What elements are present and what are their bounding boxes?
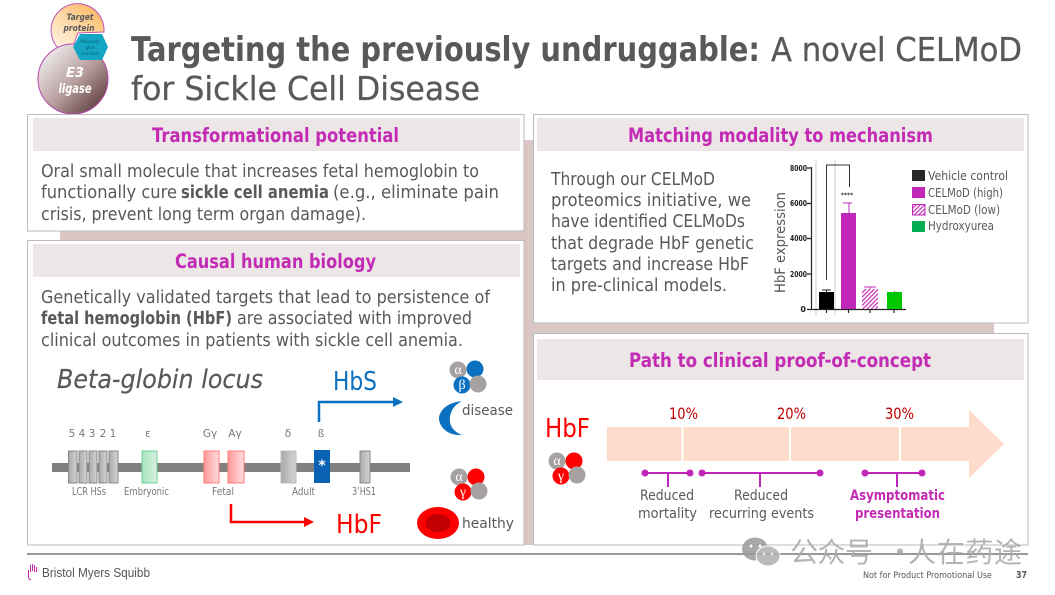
outcome: reduced mortality <box>638 470 697 522</box>
icon: healthy red cell <box>417 507 459 539</box>
chart legend <box>912 168 1008 233</box>
outcome: reduced recurring events <box>698 470 824 522</box>
bar chart: HbF expression: HbF expression <box>773 192 789 293</box>
label: HbF: HbF <box>336 510 382 540</box>
panel: transformational potential <box>28 114 524 231</box>
icon: sickle hemoglobin <box>450 360 486 394</box>
outcome: reduced mortality: mortality <box>638 506 697 522</box>
watermark: 人在药途 <box>908 531 1022 571</box>
footer note: Not for Product Promotional Use <box>863 571 992 581</box>
icon: molecular glue logo <box>38 4 108 114</box>
page number: 37 <box>1016 570 1027 581</box>
bar chart: HbF expression: **** <box>841 192 854 199</box>
gene locus diagram: 3 <box>89 428 95 440</box>
icon: sickle hemoglobin: β <box>458 378 466 393</box>
gene locus diagram: Aγ <box>228 428 242 440</box>
icon: fetal hemoglobin: γ <box>557 469 564 484</box>
panel: transformational potential: Oral small molecule that increases fetal hemoglobin to <box>41 162 479 182</box>
icon: sickle cell <box>439 401 462 435</box>
icon: fetal hemoglobin: γ <box>459 485 466 500</box>
footer rule <box>27 553 1028 555</box>
arrow: HbF level scale: 10% <box>669 404 698 423</box>
arrow: HbF level scale: 30% <box>885 404 914 423</box>
arrow: HbF level scale <box>607 404 1004 478</box>
bar chart: HbF expression: 2000 <box>790 270 807 279</box>
gene locus diagram: * <box>318 458 326 474</box>
watermark <box>742 531 1022 571</box>
bar chart: HbF expression: 4000 <box>790 234 807 243</box>
panel: transformational potential: functionally cure <box>41 183 177 203</box>
panel: matching modality to mechanism: Matching modality to mechanism <box>628 124 933 147</box>
panel: causal human biology: are associated with improved <box>237 309 472 329</box>
label: disease: disease <box>462 403 513 419</box>
title: for Sickle Cell Disease <box>131 69 480 108</box>
outcome: reduced recurring events: Reduced <box>734 488 788 504</box>
panel: path to clinical proof-of-concept <box>534 334 1028 545</box>
gene locus diagram: Embryonic <box>124 486 169 498</box>
panel: transformational potential: Transformational potential <box>152 124 399 147</box>
gene locus diagram: 3’HS1 <box>352 486 376 498</box>
bar chart: HbF expression <box>773 160 906 315</box>
icon: sickle hemoglobin: α <box>454 363 462 378</box>
outcome: reduced recurring events: recurring events <box>709 506 814 522</box>
panel: causal human biology: fetal hemoglobin (HbF) <box>41 309 232 329</box>
panel: matching modality to mechanism <box>534 114 1028 323</box>
title: A novel CELMoD <box>771 30 1022 69</box>
bar chart: HbF expression: 6000 <box>790 199 807 208</box>
arrow: HbF level scale: 20% <box>777 404 806 423</box>
bar chart: HbF expression: 0 <box>800 305 806 314</box>
label: HbF: HbF <box>545 414 590 444</box>
panel: causal human biology: clinical outcomes in patients with sickle cell anemia. <box>41 331 463 351</box>
panel: matching modality to mechanism: in pre-clinical models. <box>551 276 727 296</box>
panel: matching modality to mechanism: proteomics initiative, we <box>551 191 751 211</box>
connector band behind panels <box>60 140 994 545</box>
title <box>131 30 1022 108</box>
icon: fetal hemoglobin: α <box>455 470 463 485</box>
icon: fetal hemoglobin <box>548 452 586 484</box>
icon: molecular glue logo: ligase <box>58 82 92 97</box>
gene locus diagram: LCR HSs <box>72 486 106 498</box>
arrow: HbF <box>231 504 314 527</box>
chart legend: Vehicle control <box>928 168 1008 183</box>
chart legend: Hydroxyurea <box>928 218 994 233</box>
logo: Bristol Myers Squibb: Bristol Myers Squibb <box>42 566 150 580</box>
gene locus diagram <box>52 428 410 498</box>
chart legend: CELMoD (low) <box>928 202 1000 217</box>
icon: molecular glue logo: Molecular <box>80 39 100 44</box>
icon: molecular glue logo: glue <box>86 45 95 50</box>
panel: causal human biology <box>28 240 524 545</box>
chart legend: CELMoD (high) <box>928 185 1003 200</box>
panel: matching modality to mechanism: that degrade HbF genetic <box>551 234 754 254</box>
outcome: reduced mortality: Reduced <box>640 488 694 504</box>
icon: molecular glue logo: E3 <box>66 66 84 81</box>
gene locus diagram: ß <box>318 428 325 440</box>
watermark: · <box>886 531 914 571</box>
gene locus diagram: Gγ <box>203 428 217 440</box>
outcome: asymptomatic presentation: presentation <box>855 506 940 522</box>
gene locus diagram: 5 <box>69 428 75 440</box>
title: Targeting the previously undruggable: <box>131 30 760 70</box>
outcome: asymptomatic presentation: Asymptomatic <box>850 488 945 504</box>
icon: fetal hemoglobin: α <box>553 454 561 469</box>
gene locus diagram: 2 <box>100 428 106 440</box>
heading: beta-globin locus: Beta-globin locus <box>57 365 263 395</box>
icon: fetal hemoglobin <box>450 468 488 500</box>
gene locus diagram: Fetal <box>212 486 234 498</box>
icon: molecular glue logo: molecule <box>81 51 100 56</box>
panel: matching modality to mechanism: targets and increase HbF <box>551 255 749 275</box>
bar chart: HbF expression: 8000 <box>790 164 807 173</box>
outcome: asymptomatic presentation <box>850 470 945 522</box>
panel: matching modality to mechanism: have identified CELMoDs <box>551 212 745 232</box>
label: healthy: healthy <box>462 516 514 532</box>
arrow: HbS <box>319 397 403 422</box>
watermark: 公众号 <box>790 531 873 571</box>
panel: path to clinical proof-of-concept: Path to clinical proof-of-concept <box>629 349 931 372</box>
icon: molecular glue logo: Target <box>66 13 94 23</box>
icon: molecular glue logo: protein <box>63 24 94 34</box>
panel: transformational potential: crisis, prevent long term organ damage). <box>41 205 366 225</box>
gene locus diagram: δ <box>285 428 291 440</box>
gene locus diagram: 4 <box>79 428 86 440</box>
panel: transformational potential: (e.g., eliminate pain <box>333 183 499 203</box>
panel: matching modality to mechanism: Through our CELMoD <box>550 170 715 190</box>
label: HbS: HbS <box>333 367 377 397</box>
panel: causal human biology: Genetically validated targets that lead to persistence of <box>41 288 491 308</box>
panel: causal human biology: Causal human biology <box>175 250 376 273</box>
gene locus diagram: Adult <box>292 486 315 498</box>
gene locus diagram: ε <box>145 428 151 440</box>
panel: transformational potential: sickle cell anemia <box>181 183 329 203</box>
gene locus diagram: 1 <box>110 428 116 440</box>
